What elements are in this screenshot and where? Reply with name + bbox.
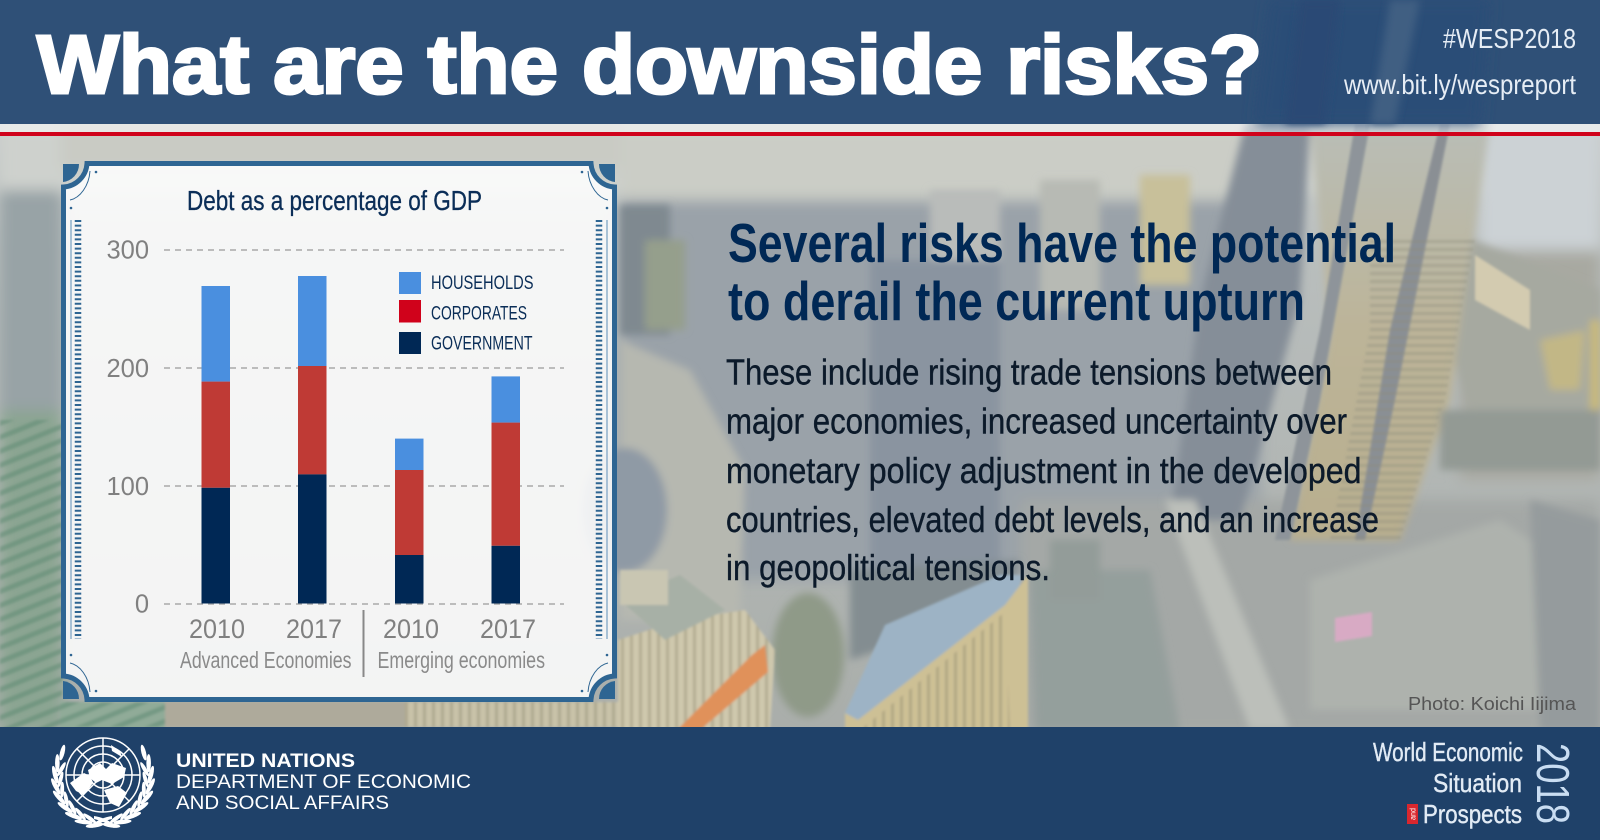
bar: advanced 2017 [298,276,326,604]
chart title: Debt as a percentage of GDP [187,185,482,216]
x axis year labels: 2010 [189,614,245,644]
UN DESA wordmark: UNITED NATIONS [176,750,355,772]
body text: monetary policy adjustment in the developed [726,450,1362,491]
WESP 2018 logo: World Economic [1373,737,1523,767]
photo credit: Photo: Koichi Iijima [1408,694,1577,714]
y axis labels [106,236,149,618]
UN DESA wordmark: DEPARTMENT OF ECONOMIC [176,771,471,793]
bar chart [106,236,564,677]
body text: major economies, increased uncertainty over [726,400,1347,442]
bar: emerging 2010 [395,439,424,604]
legend: HOUSEHOLDS [431,272,534,294]
legend [399,272,534,354]
WESP 2018 logo: and [1408,808,1418,820]
icon: UN emblem [49,738,157,829]
heading: Several risks have the potential [728,212,1396,274]
WESP 2018 logo: Prospects [1423,799,1522,829]
legend: CORPORATES [431,302,527,324]
footer band [0,727,1600,840]
x axis year labels: 2010 [383,614,439,644]
x axis year labels [189,614,536,644]
WESP 2018 logo: Situation [1433,768,1522,798]
body text: in geopolitical tensions. [726,547,1050,588]
header band [0,0,1600,132]
group labels [180,647,545,673]
cream building with sign [618,610,775,730]
heading: to derail the current upturn [728,270,1305,332]
y axis labels: 200 [106,355,149,383]
hashtag: #WESP2018 [1443,23,1576,54]
group labels: Emerging economies [378,647,545,673]
UN DESA wordmark [176,750,471,814]
legend: GOVERNMENT [431,332,533,354]
y axis labels: 300 [106,236,149,264]
x axis year labels: 2017 [480,614,536,644]
y axis labels: 0 [135,590,149,618]
title: What are the downside risks? [37,18,1262,111]
group labels: Advanced Economies [180,647,352,673]
UN DESA wordmark: AND SOCIAL AFFAIRS [176,792,389,814]
tower detail [1275,124,1370,540]
bar: advanced 2010 [202,286,230,604]
body text: countries, elevated debt levels, and an increase [726,499,1379,540]
body text [726,352,1379,588]
red rule [0,132,1600,136]
bar: emerging 2017 [492,376,520,604]
body text: These include rising trade tensions between [726,352,1332,392]
panel: debt chart card [63,164,615,700]
WESP 2018 logo [1373,737,1579,829]
y axis labels: 100 [106,473,149,501]
x axis year labels: 2017 [286,614,342,644]
roof and tan building [845,575,1022,727]
lower-left green block [0,420,62,730]
heading [728,212,1396,332]
